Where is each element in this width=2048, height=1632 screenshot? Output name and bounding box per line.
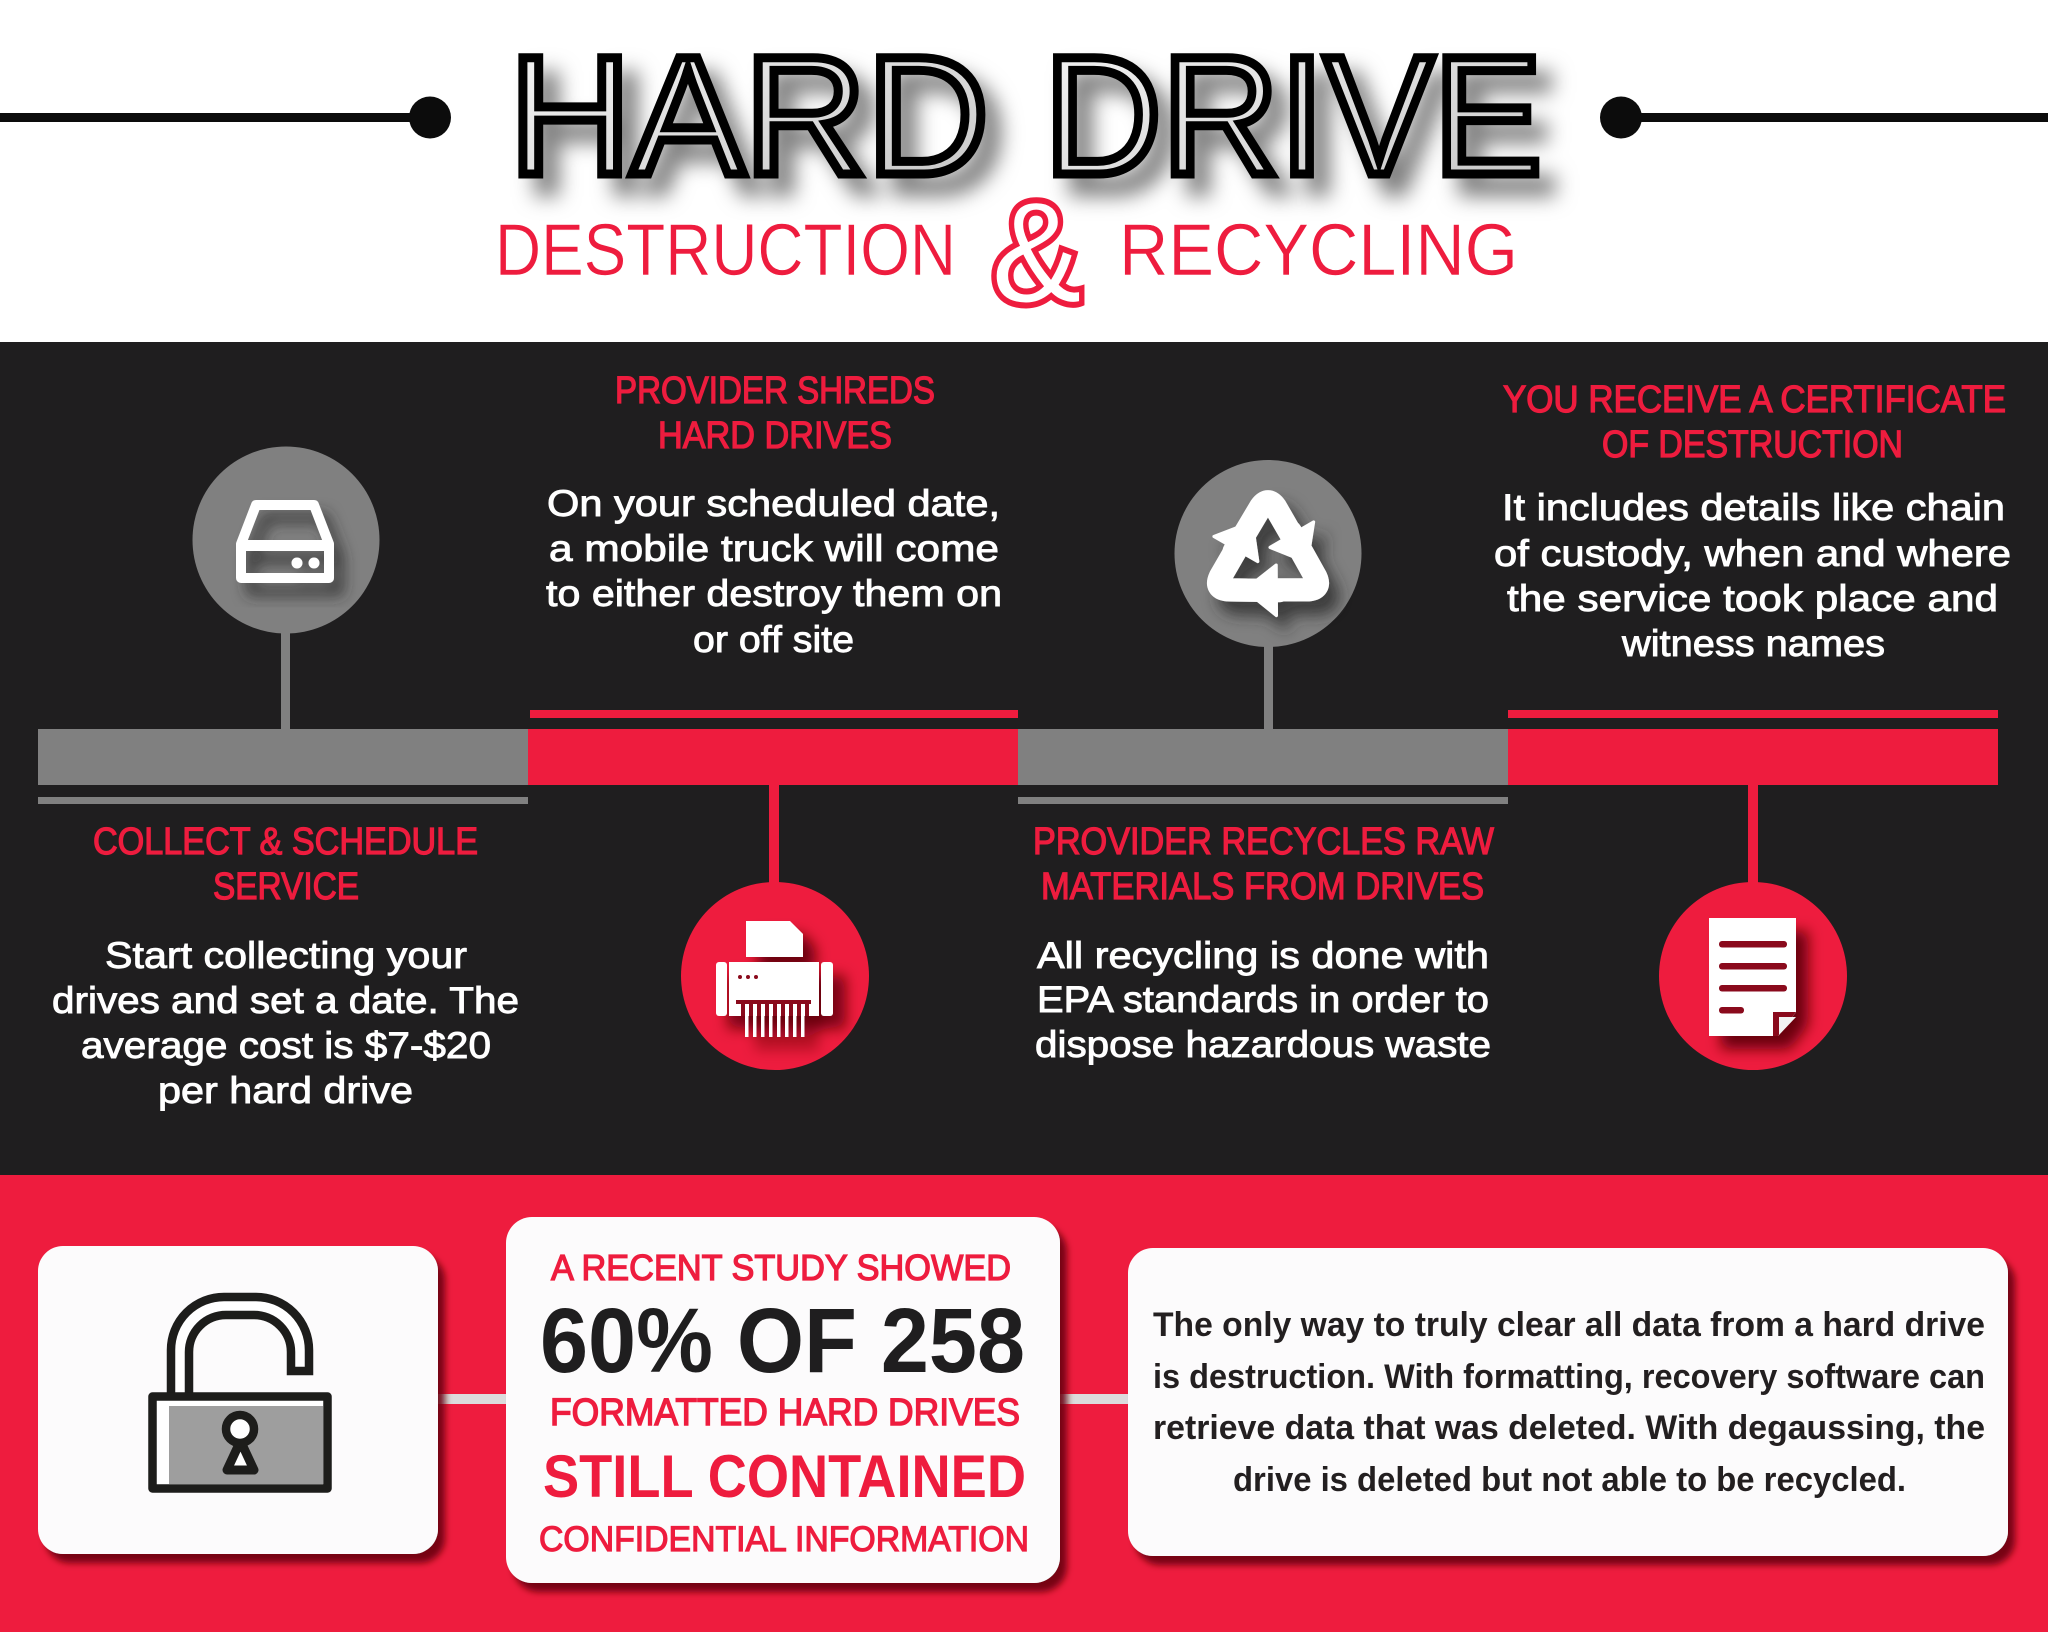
step 1 text: Start collecting your [105,935,467,976]
step 2 heading: HARD DRIVES [658,415,892,457]
title: HARD [509,21,989,210]
step 4 text: It includes details like chain [1502,487,2005,528]
step 2 heading: PROVIDER SHREDS [615,370,935,412]
explanation text: retrieve data that was deleted. With degaussing, the [1153,1409,1985,1447]
explanation text: drive is deleted but not able to be recycled. [1233,1461,1906,1499]
step 4 text: the service took place and [1507,578,1998,619]
explanation text [1153,1306,1985,1499]
connector lines [437,1394,1129,1404]
step 1 text: average cost is $7-$20 [81,1025,491,1066]
step 2 text [546,483,1002,660]
statistic text: STILL CONTAINED [543,1443,1026,1510]
right header rule with dot [1600,96,2048,138]
step 3: recycling icon [1174,460,1362,730]
step 1 text [52,935,519,1111]
subtitle: RECYCLING [1119,210,1518,291]
step 1 heading [93,821,478,908]
panel: red statistics band [0,1175,2048,1632]
step 4 text: witness names [1621,623,1885,664]
icon: open padlock [152,1297,328,1488]
step 3 text: EPA standards in order to [1037,979,1489,1020]
step 4: certificate icon [1659,784,1847,1070]
step 1 text: drives and set a date. The [52,980,519,1021]
step 2 heading [615,370,935,457]
step 4 text [1494,487,2011,664]
step 4 text: of custody, when and where [1494,533,2011,574]
step 4 heading: YOU RECEIVE A CERTIFICATE [1503,379,2006,421]
statistic text: FORMATTED HARD DRIVES [550,1392,1020,1434]
statistic text: 60% OF 258 [540,1290,1025,1392]
step 4 heading: OF DESTRUCTION [1602,424,1903,466]
title [509,21,1542,210]
explanation text: The only way to truly clear all data from a hard drive [1153,1306,1985,1344]
left header rule with dot [0,96,451,138]
subtitle: DESTRUCTION [495,210,956,291]
statistic text: CONFIDENTIAL INFORMATION [539,1520,1029,1559]
step 3 text [1035,935,1491,1065]
step 2 text: to either destroy them on [546,573,1002,614]
step 3 text: All recycling is done with [1037,935,1489,976]
explanation text: is destruction. With formatting, recovery software can [1153,1358,1985,1396]
subtitle: & [988,168,1086,336]
step 4 heading [1503,379,2006,466]
statistic text: A RECENT STUDY SHOWED [551,1247,1011,1288]
step 1 text: per hard drive [158,1070,413,1111]
card: unlocked padlock [38,1246,438,1554]
timeline bar [38,710,1998,804]
header background [0,0,2048,342]
step 1 heading: COLLECT & SCHEDULE [93,821,478,863]
step 3 heading: PROVIDER RECYCLES RAW [1033,821,1494,863]
panel: process timeline [0,342,2048,1175]
statistic text [539,1247,1029,1559]
step 2 text: or off site [693,619,854,660]
step 3 text: dispose hazardous waste [1035,1024,1491,1065]
step 1 heading: SERVICE [213,866,359,908]
card: study statistic [506,1217,1060,1583]
step 3 heading [1033,821,1494,908]
step 2: shredder icon [681,784,869,1070]
title: DRIVE [1044,21,1542,210]
subtitle [495,168,1518,336]
step 2 text: a mobile truck will come [549,528,999,569]
card: explanation [1128,1248,2008,1556]
step 2 text: On your scheduled date, [547,483,1000,524]
step 1: hard drive icon [192,446,380,730]
step 3 heading: MATERIALS FROM DRIVES [1041,866,1484,908]
